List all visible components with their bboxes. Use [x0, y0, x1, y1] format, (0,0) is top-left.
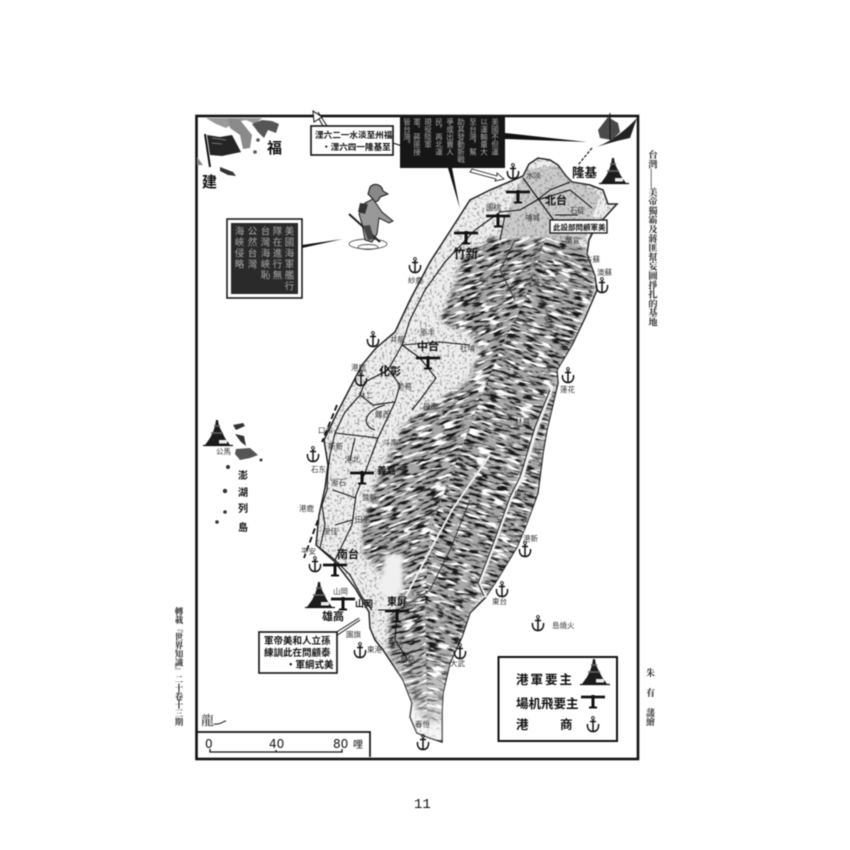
place name labels, small: 里佳 — [323, 526, 338, 536]
callout box: US Seventh Fleet — [227, 219, 302, 298]
warships: main naval ports — [203, 158, 629, 608]
place name labels, small: 水淡 — [526, 170, 541, 180]
black callout box: US military supply: 爭或出賣人 — [445, 117, 454, 156]
planes: main airfields — [323, 190, 530, 622]
scale bar: 40 — [269, 737, 284, 751]
plains stipple — [300, 150, 620, 750]
Fujian coast and islands — [197, 118, 279, 176]
place name labels, large: 隆基 — [572, 165, 598, 180]
place name labels, small: 社埔 — [460, 343, 475, 353]
place name labels, small: 方蘇 — [585, 254, 600, 264]
black callout box: US military supply: 助其發動新戰 — [456, 117, 466, 164]
callout: Sun Li-jen training: 軍帝美和人立孫 — [264, 635, 331, 647]
black callout box: US military supply — [400, 115, 505, 168]
soldier wading icon — [349, 184, 393, 250]
label: Fujian — [202, 140, 282, 191]
callout: US advisory group: 此設部問顧軍美 — [553, 222, 606, 232]
place name labels, large — [322, 165, 598, 623]
place name labels, small: 公馬 — [216, 447, 231, 456]
place name labels, small — [216, 170, 612, 729]
leader lines from black box — [448, 133, 592, 209]
callout: distances from Fuzhou: 浬六二一水淡至州福 — [315, 129, 393, 140]
label: Penghu islands: 澎 — [238, 469, 248, 482]
map page — [174, 110, 658, 809]
Penghu island shapes — [215, 423, 262, 524]
northern hills shading — [500, 165, 600, 240]
place name labels, small: 斗南 — [383, 437, 398, 447]
place name labels, small: 港新 — [523, 533, 538, 543]
place name labels, small: 里玉 — [514, 490, 529, 499]
label: Penghu islands: 列 — [238, 502, 248, 515]
side credit: artist: 蘐繪 — [645, 707, 655, 727]
legend row: commercial ports: 商 — [560, 717, 573, 732]
place name labels, small: 港鹿 — [351, 362, 366, 372]
callout: distances from Fuzhou: ・浬六四一隆基至 — [322, 141, 391, 152]
label: Penghu islands — [238, 469, 248, 534]
place name labels, small: 石东 — [311, 464, 326, 474]
legend row: commercial ports: 港 — [516, 717, 529, 732]
southern tail fade — [400, 640, 450, 740]
label: Fujian: 建 — [202, 173, 217, 191]
scale bar: 哩 — [353, 739, 363, 751]
place name labels, small: 港鹿 — [299, 503, 314, 513]
place name labels, small: 螺西 — [375, 409, 390, 419]
flag — [205, 134, 241, 167]
place name labels, small: 大武 — [450, 658, 465, 668]
callout: Sun Li-jen training: 練訓此在問顧泰 — [264, 647, 331, 659]
callout: distances from Fuzhou — [311, 111, 402, 155]
island base — [316, 158, 617, 742]
label: Penghu islands: 湖 — [238, 486, 248, 499]
place name labels, small: 東台 — [492, 596, 507, 606]
side credit: artist: 朱 — [645, 667, 655, 678]
place name labels, small: 田平 — [355, 515, 370, 524]
legend row: main airfields: 場机飛要主 — [516, 696, 579, 711]
western mountain slopes — [360, 234, 546, 723]
place name labels, small: 投南 — [423, 401, 438, 411]
rivers and rift valley — [380, 240, 552, 618]
place name labels, small: 寮枋 — [400, 654, 415, 664]
place name labels, small: 里枋 — [388, 639, 403, 649]
Pingtung plain — [379, 553, 404, 602]
label: Penghu islands: 島 — [238, 521, 248, 534]
place name labels, large: 東屏 — [387, 595, 407, 608]
page number: 11 — [414, 797, 431, 813]
black callout box: US military supply: 以運輸量大 — [479, 118, 488, 157]
black callout box: US military supply: 美國不但運 — [490, 117, 500, 157]
callout box: US Seventh Fleet: 海峽侵略 — [232, 225, 244, 270]
place name labels, small: 港北 — [345, 454, 360, 464]
anchors: commercial ports — [307, 164, 608, 750]
place name labels, small: 島燒火 — [552, 620, 575, 630]
place name labels, small: 石碇 — [570, 205, 585, 215]
side title: 台灣——美帝獨霸及蔣匪幫妄圖掙扎的基地 — [647, 149, 659, 327]
place name labels, large: 雄高 — [322, 609, 344, 623]
place name labels, small: 東港 — [367, 644, 382, 654]
place name labels, small: 勢易 — [397, 381, 412, 391]
place name labels, small: 春恒 — [415, 719, 430, 729]
map frame — [196, 116, 638, 759]
scale bar — [196, 732, 370, 757]
scale bar: 80 — [333, 737, 348, 751]
place name labels, large: 中台 — [417, 339, 439, 353]
offshore sand bars — [304, 405, 337, 558]
place name labels, small: 山岡 — [333, 586, 348, 596]
side credit: artist: 有 — [645, 687, 655, 697]
place name labels, large: 北台 — [545, 193, 567, 207]
callout box: US Seventh Fleet: 隊在進行無 — [270, 225, 282, 281]
map of Taiwan island — [202, 156, 630, 752]
callout box: US Seventh Fleet: 美國海軍艦行 — [282, 225, 294, 292]
place name labels, large: 南台 — [337, 547, 359, 561]
callout box: US Seventh Fleet: 台灣海峽恥 — [258, 225, 270, 281]
place name labels, small: 園旗 — [346, 629, 361, 639]
place name labels, small: 林二 — [358, 390, 373, 400]
black callout box: US military supply: 管台灣。 — [402, 117, 412, 148]
place name labels, small: 紗鹿 — [408, 275, 423, 285]
place name labels, small: 澳蘇 — [597, 267, 612, 277]
place name labels, small: 原丰 — [420, 327, 435, 337]
place name labels, large: 竹新 — [453, 246, 479, 261]
black callout box: US military supply: 現役陸軍 — [423, 118, 432, 148]
place name labels, small: 营新 — [362, 492, 377, 502]
eastern mountain slopes — [424, 236, 596, 725]
artist signature — [201, 713, 226, 728]
place name labels, small: 斯新 — [328, 441, 343, 451]
place name labels, small: 園桃 — [486, 202, 501, 212]
black callout box: US military supply: 民，再北運 — [434, 118, 444, 157]
place name labels, small: 埔城 — [525, 212, 540, 222]
legend row: commercial ports — [516, 717, 599, 732]
callout: Sun Li-jen training: ・軍綱式美 — [286, 659, 334, 671]
artist signature: 龍 — [201, 713, 214, 728]
callout: US advisory group — [523, 178, 607, 233]
place name labels, small: 蘭宜 — [565, 235, 580, 245]
place name labels, small: 平安 — [301, 546, 316, 556]
callout box: US Seventh Fleet: 公然台灣 — [246, 226, 257, 270]
place name labels, large: 化彰 — [379, 364, 401, 378]
label: Fujian: 福 — [267, 140, 282, 157]
railways and roads — [320, 182, 592, 660]
place name labels, large: 義嘉 — [377, 465, 396, 477]
mountain ranges — [359, 234, 596, 726]
place name labels, small: 井龍 — [390, 334, 405, 344]
side credit: artist — [645, 667, 655, 727]
place name labels, small: 栗苗 — [525, 278, 540, 287]
legend — [498, 657, 617, 741]
gunboat icon — [593, 113, 637, 148]
place name labels, small: 浙石 — [331, 477, 346, 487]
place name labels, large: 山岡 — [355, 598, 373, 609]
place name labels, small: 蓮花 — [560, 384, 575, 394]
pointer from box to soldier — [302, 239, 343, 248]
place name labels, small: 林鳳 — [515, 416, 530, 426]
black callout box: US military supply: 軍，蔣匪接 — [412, 118, 422, 157]
place name labels, small: 口布 — [318, 425, 333, 435]
side credit: source: 轉載『世界知識』二十卷十三期 — [174, 606, 184, 727]
callout: Sun Li-jen training — [259, 618, 360, 673]
scale bar: 0 — [205, 737, 213, 751]
legend row: main naval ports: 港軍要主 — [516, 672, 574, 687]
black callout box: US military supply: 至台灣，幫 — [468, 118, 478, 157]
